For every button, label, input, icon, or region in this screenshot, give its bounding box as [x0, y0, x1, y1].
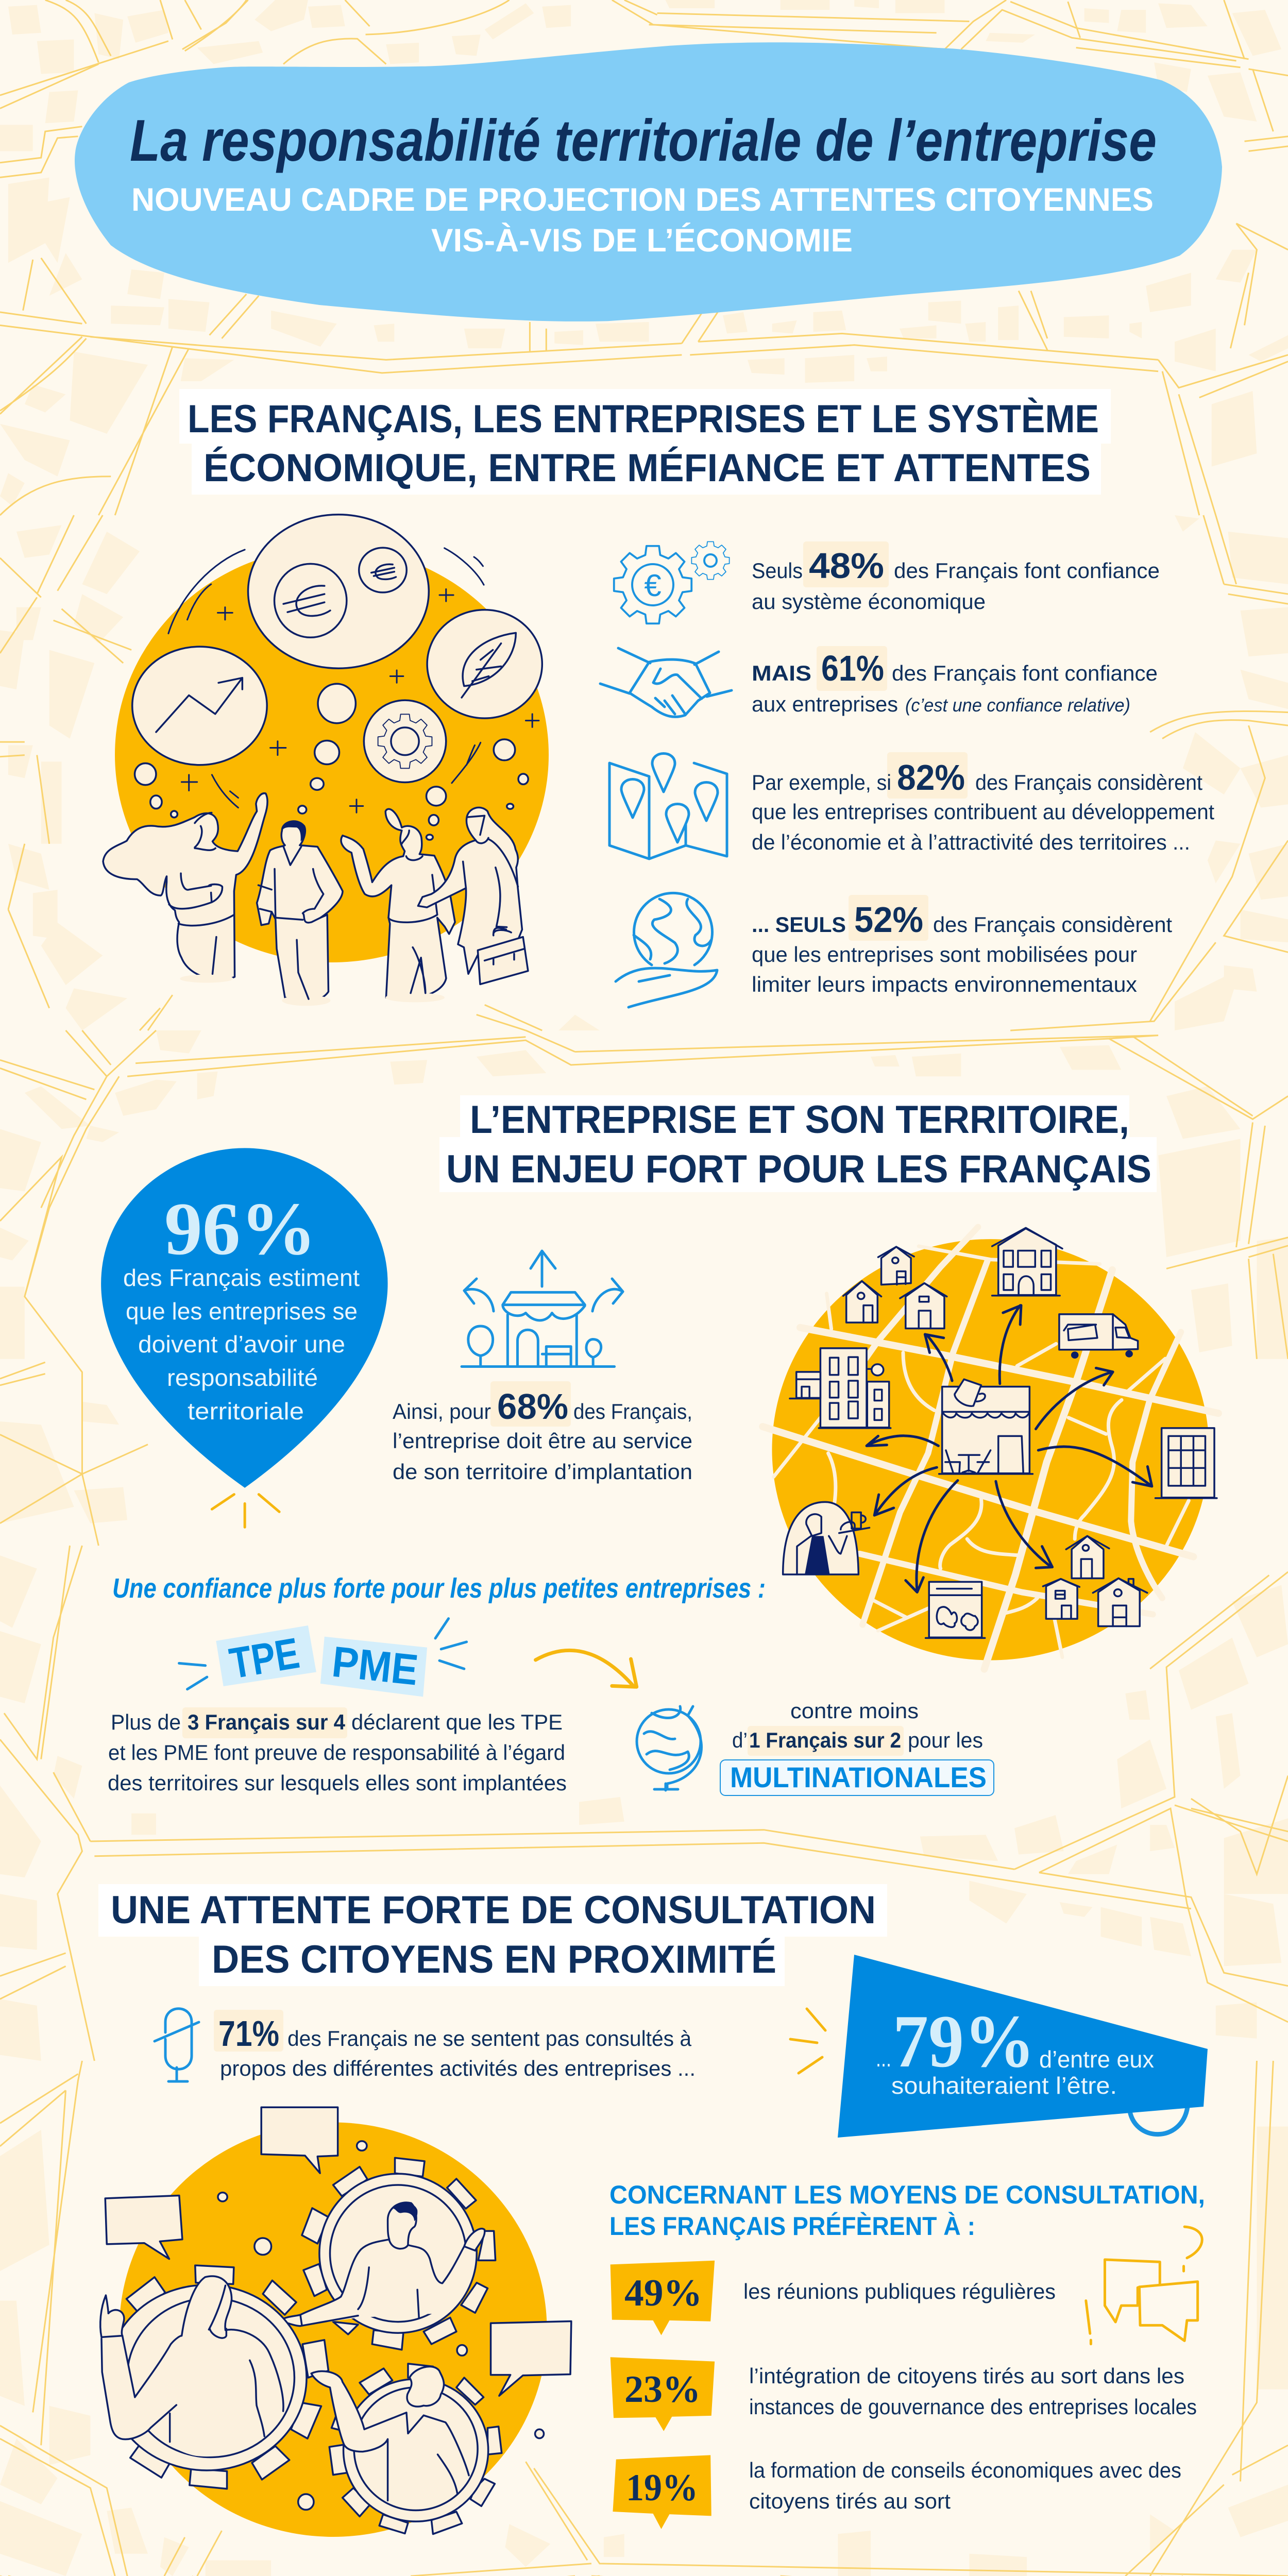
68% block: 68% — [497, 1386, 568, 1427]
subtitle — [131, 182, 1154, 259]
stat row: 52%: 52% — [854, 900, 923, 940]
subheading: small businesses: Une confiance plus forte pour les plus petites entreprises : — [112, 1573, 766, 1604]
icon: yellow chat bubbles — [1086, 2227, 1202, 2344]
stat row: 61%: 61% — [821, 648, 884, 688]
68% block — [393, 1251, 692, 1484]
banner: 79%: d’entre eux — [1039, 2046, 1154, 2073]
central shop — [939, 1379, 1032, 1474]
text: 1 Français sur 2: contre moins — [790, 1699, 919, 1723]
heading: consultation means — [609, 2180, 1205, 2241]
68% block: de son territoire d’implantation — [393, 1460, 692, 1484]
text: 1 Français sur 2: 1 Français sur 2 — [749, 1728, 901, 1752]
stat row: 48%: au système économique — [752, 589, 986, 614]
banner: 79% — [790, 1955, 1208, 2138]
stat row: 82%: Par exemple, si — [752, 770, 891, 794]
stat: 19% — [613, 2455, 1181, 2529]
small bubbles and plus signs — [134, 548, 539, 840]
map pin: 96%: des Français estiment — [123, 1264, 360, 1291]
banner: 79%: ... — [876, 2045, 891, 2072]
stat row: 48% — [614, 541, 1160, 623]
stat: 49%: les réunions publiques régulières — [743, 2279, 1056, 2303]
bubble: growth chart — [132, 647, 267, 765]
stat: 23%: l’intégration de citoyens tirés au sort dans les — [749, 2364, 1184, 2388]
section 1 heading: ÉCONOMIQUE, ENTRE MÉFIANCE ET ATTENTES — [204, 446, 1091, 490]
stat: 49%: 49% — [624, 2272, 702, 2314]
stat row: 52%: limiter leurs impacts environnementaux — [752, 972, 1137, 996]
window block — [1156, 1428, 1217, 1498]
arrow: yellow — [536, 1650, 637, 1687]
stat row: 52%: que les entreprises sont mobilisées pour — [752, 942, 1137, 967]
stat: 19%: citoyens tirés au sort — [749, 2489, 951, 2513]
stat: 19%: 19% — [626, 2467, 698, 2509]
person 3 — [341, 809, 455, 1002]
subtitle: NOUVEAU CADRE DE PROJECTION DES ATTENTES CITOYENNES — [131, 182, 1154, 218]
title blob — [75, 42, 1222, 321]
stat: 23%: 23% — [624, 2368, 701, 2411]
bubble: gear — [364, 700, 446, 783]
section 3 heading: UNE ATTENTE FORTE DE CONSULTATION — [111, 1888, 876, 1932]
stat row: 48%: des Français font confiance — [894, 558, 1160, 583]
stat: 23%: instances de gouvernance des entreprises locales — [749, 2395, 1197, 2419]
71% block: des Français ne se sentent pas consultés à — [287, 2026, 692, 2050]
stat row: 52%: ... SEULS — [752, 912, 846, 937]
section 1 heading — [179, 389, 1111, 495]
bubble: euro coins — [248, 515, 429, 668]
section 2 heading: UN ENJEU FORT POUR LES FRANÇAIS — [446, 1147, 1151, 1191]
68% block: des Français, — [573, 1399, 692, 1423]
icon: gears with euro: € — [644, 568, 662, 603]
icon: handshake — [600, 648, 732, 717]
stat row: 52%: des Français considèrent — [933, 912, 1172, 937]
stat row: 82% — [609, 752, 1214, 859]
truck — [1059, 1314, 1138, 1359]
illustration: citizens around gears — [100, 2107, 571, 2537]
icon: desk globe — [637, 1706, 701, 1790]
stat row: 82%: 82% — [897, 757, 965, 798]
stat row: 48%: 48% — [809, 546, 884, 586]
heading: consultation means: CONCERNANT LES MOYENS DE CONSULTATION, — [609, 2180, 1205, 2209]
text: 1 Français sur 2: pour les — [908, 1728, 983, 1752]
71% block — [155, 2009, 696, 2081]
map pin: 96%: 96% — [164, 1187, 316, 1270]
icon: gears with euro — [614, 541, 730, 623]
section 2 heading — [439, 1095, 1157, 1192]
office block — [790, 1348, 891, 1428]
71% block: 71% — [218, 2013, 279, 2054]
stat row: 61%: des Français font confiance — [892, 661, 1158, 685]
text: 3 Français sur 4: et les PME font preuve de responsabilité à l’égard — [108, 1740, 565, 1765]
text: 3 Français sur 4: 3 Français sur 4 — [188, 1710, 346, 1734]
houses top — [843, 1228, 1062, 1328]
stat: 23% — [611, 2357, 1197, 2431]
speech bubbles — [105, 2107, 571, 2510]
gear person: top right — [280, 2158, 496, 2350]
badges TPE PME: PME — [330, 1637, 420, 1694]
text: 1 Français sur 2 — [732, 1699, 983, 1756]
banner: 79%: souhaiteraient l’être. — [891, 2072, 1117, 2099]
stat row: 61% — [600, 646, 1158, 717]
badge: multinationales: MULTINATIONALES — [730, 1761, 987, 1793]
stat row: 48%: Seuls — [752, 558, 803, 583]
bubble: leaf — [427, 610, 542, 718]
text: 3 Français sur 4 — [108, 1707, 567, 1795]
waiter — [783, 1502, 870, 1574]
map pin: 96%: responsabilité — [167, 1364, 318, 1391]
icon: folded map with pins — [609, 753, 727, 859]
icon: crossed microphone — [155, 2009, 199, 2081]
71% block: propos des différentes activités des entreprises ... — [220, 2056, 696, 2080]
title banner — [75, 42, 1222, 321]
stat: 19%: la formation de conseils économiques avec des — [749, 2458, 1181, 2482]
map pin: 96%: territoriale — [188, 1398, 304, 1425]
person 4 with briefcase — [418, 807, 528, 984]
banner: 79%: 79% — [893, 1999, 1035, 2083]
illustration: shop radiating into the city — [762, 1227, 1218, 1669]
stat row: 61%: (c’est une confiance relative) — [905, 694, 1130, 716]
map pin: 96% — [101, 1148, 388, 1527]
illustration: people and idea bubbles — [103, 515, 549, 1006]
text: 1 Français sur 2: d’ — [732, 1728, 748, 1752]
person 1 — [103, 793, 267, 983]
street map — [762, 1227, 1218, 1669]
gear person: left — [100, 2265, 328, 2489]
map pin: 96%: doivent d’avoir une — [138, 1331, 345, 1358]
flower shop — [926, 1582, 985, 1638]
gear person: bottom right — [311, 2364, 502, 2534]
houses bottom — [1043, 1536, 1147, 1626]
text: 3 Français sur 4: Plus de — [111, 1710, 181, 1734]
stat row: 82%: de l’économie et à l’attractivité des territoires ... — [752, 830, 1190, 854]
map pin: 96%: que les entreprises se — [126, 1298, 358, 1325]
subtitle: VIS-À-VIS DE L’ÉCONOMIE — [431, 223, 853, 259]
badges TPE PME: TPE — [226, 1629, 303, 1688]
arrows — [867, 1306, 1152, 1592]
stat row: 61%: aux entreprises — [752, 692, 898, 716]
stat row: 52% — [616, 893, 1172, 1007]
section 1 heading: LES FRANÇAIS, LES ENTREPRISES ET LE SYSTÈME — [188, 397, 1099, 441]
stat row: 82%: que les entreprises contribuent au développement — [752, 800, 1214, 824]
section 3 heading: DES CITOYENS EN PROXIMITÉ — [212, 1938, 776, 1981]
68% block: Ainsi, pour — [393, 1399, 491, 1423]
icon: shop with arrows — [462, 1251, 623, 1366]
badges TPE PME — [179, 1619, 467, 1697]
icon: globe in hand — [616, 893, 717, 1007]
heading: consultation means: LES FRANÇAIS PRÉFÈRENT À : — [609, 2212, 975, 2241]
68% block: l’entreprise doit être au service — [393, 1429, 692, 1453]
section 3 heading — [98, 1884, 887, 1986]
section 2 heading: L’ENTREPRISE ET SON TERRITOIRE, — [470, 1098, 1129, 1142]
text: 3 Français sur 4: déclarent que les TPE — [351, 1710, 563, 1734]
stat: 49% — [611, 2261, 1056, 2335]
stat row: 61%: MAIS — [752, 661, 811, 685]
text: 3 Français sur 4: des territoires sur lesquels elles sont implantées — [108, 1771, 567, 1795]
person 2 — [257, 821, 343, 1006]
stat row: 82%: des Français considèrent — [975, 770, 1202, 794]
section 1 statistics — [600, 541, 1214, 1007]
